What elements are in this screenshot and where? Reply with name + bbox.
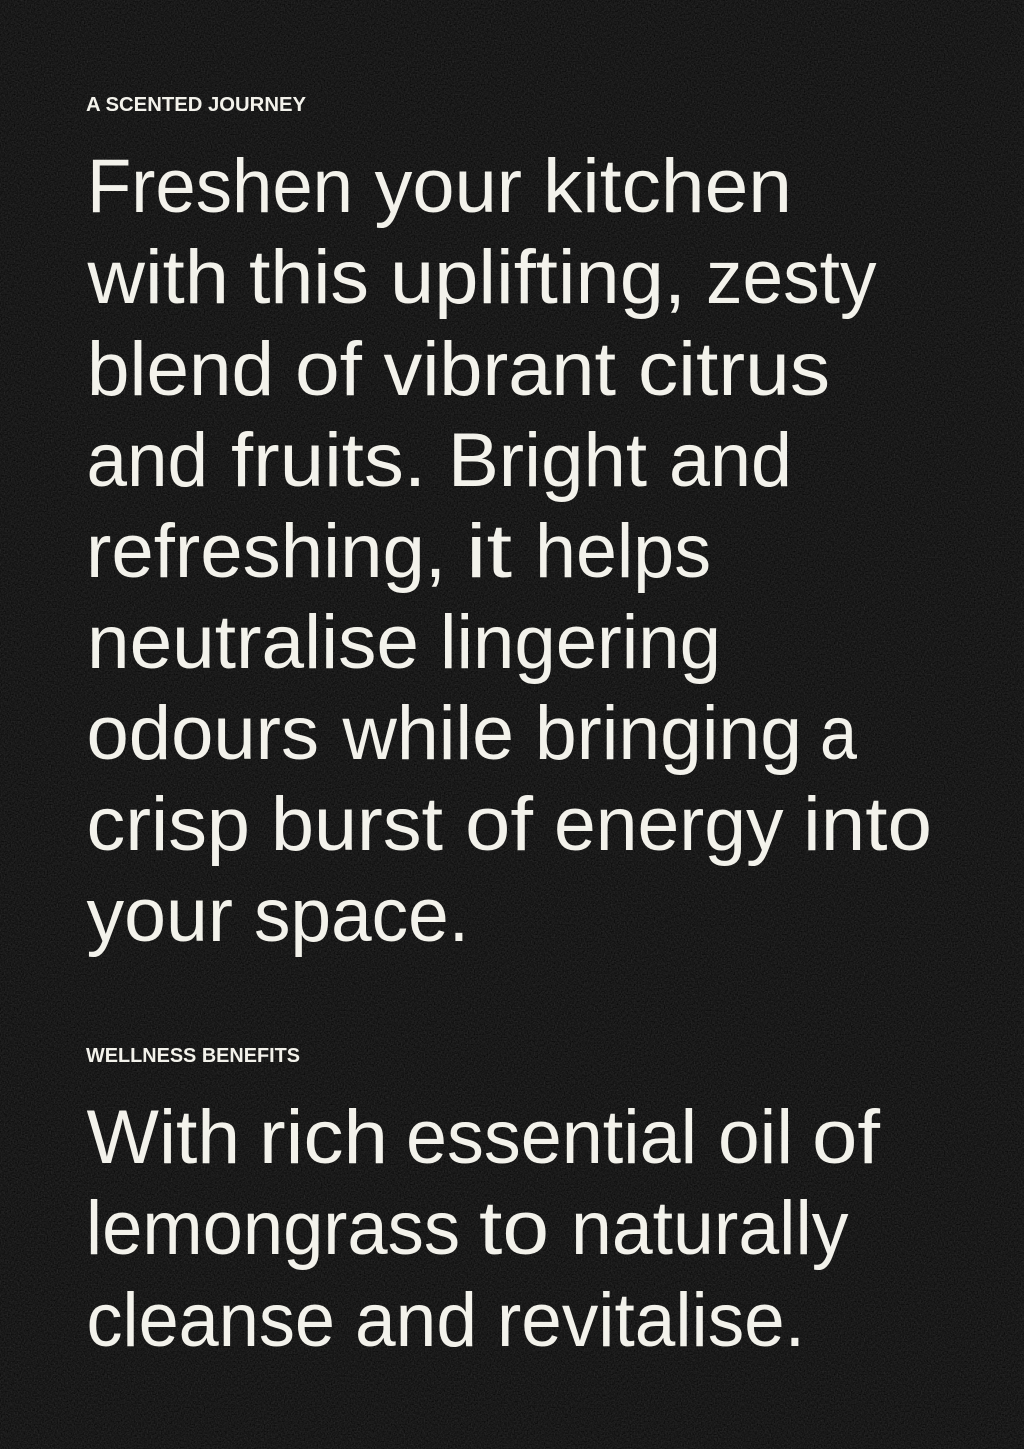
paragraph: scent description: lingering — [440, 600, 721, 685]
paragraph: scent description: helps — [535, 509, 711, 594]
label: wellness benefits: WELLNESS BENEFITS — [86, 1045, 300, 1067]
paragraph: scent description: with — [86, 235, 229, 320]
paragraph: benefits description: naturally — [571, 1186, 848, 1271]
paragraph: scent description: your — [86, 873, 233, 958]
paragraph: scent description: of — [295, 327, 363, 412]
label: a scented journey: A SCENTED JOURNEY — [86, 94, 307, 116]
paragraph: benefits description: essential — [406, 1095, 697, 1180]
paragraph: scent description: odours — [86, 691, 319, 776]
paragraph: scent description: a — [820, 691, 858, 776]
paragraph: benefits description: oil — [718, 1095, 793, 1180]
paragraph: scent description: Bright — [448, 418, 647, 503]
paragraph: benefits description: lemongrass — [86, 1186, 460, 1271]
paragraph: scent description: crisp — [86, 782, 250, 867]
paragraph: scent description: uplifting, — [390, 235, 686, 320]
paragraph: scent description: into — [803, 782, 932, 867]
paragraph: scent description: citrus — [638, 327, 830, 412]
paragraph: benefits description: cleanse — [86, 1278, 335, 1363]
paragraph: scent description — [86, 144, 932, 958]
paragraph: scent description: neutralise — [87, 600, 419, 685]
paragraph: scent description: your — [374, 144, 522, 229]
paragraph: scent description: blend — [87, 327, 274, 412]
paragraph: scent description: refreshing, — [86, 509, 446, 594]
paragraph: scent description: zesty — [706, 235, 876, 320]
paragraph: benefits description: to — [479, 1186, 549, 1271]
paragraph: scent description: vibrant — [384, 327, 616, 412]
paragraph: scent description: kitchen — [543, 144, 792, 229]
paragraph: benefits description: of — [812, 1095, 881, 1180]
paragraph: scent description: and — [669, 418, 792, 503]
paragraph: scent description: this — [249, 235, 369, 320]
paragraph: scent description: energy — [554, 782, 784, 867]
paragraph: scent description: fruits. — [231, 418, 426, 503]
paragraph: benefits description: revitalise. — [497, 1278, 805, 1363]
paragraph: benefits description: and — [355, 1278, 477, 1363]
paragraph: scent description: and — [86, 418, 208, 503]
paragraph: scent description: it — [466, 509, 512, 594]
paragraph: benefits description: rich — [259, 1095, 388, 1180]
paragraph: scent description: of — [465, 782, 534, 867]
paragraph: scent description: bringing — [535, 691, 802, 776]
paragraph: benefits description: With — [86, 1095, 240, 1180]
paragraph: scent description: burst — [271, 782, 443, 867]
paragraph: scent description: space. — [254, 873, 469, 958]
paragraph: scent description: Freshen — [87, 144, 353, 229]
paragraph: benefits description — [86, 1095, 881, 1363]
paragraph: scent description: while — [342, 691, 514, 776]
